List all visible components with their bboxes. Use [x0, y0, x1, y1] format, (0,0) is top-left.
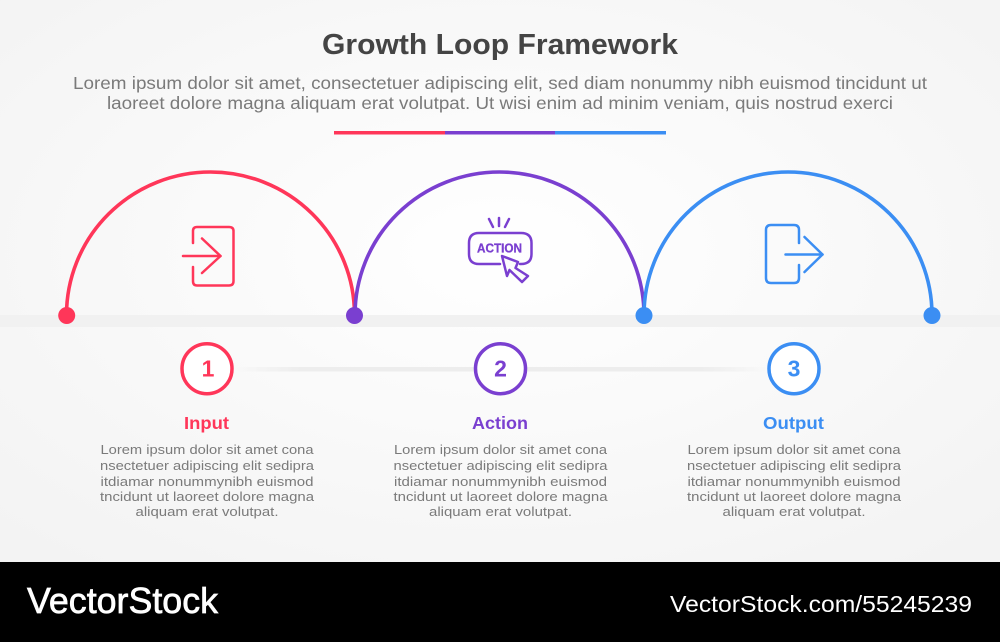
subtitle: Lorem ipsum dolor sit amet, consectetuer adipiscing elit, sed diam nonummy nibh euismod tincidunt ut [73, 73, 927, 93]
step 3 [687, 344, 902, 519]
text block: action: aliquam erat volutpat. [429, 504, 572, 519]
text block: input: tncidunt ut laoreet dolore magna [100, 489, 315, 504]
text block: output [687, 442, 902, 519]
connector between numbers [234, 367, 768, 372]
title: Growth Loop Framework [322, 29, 679, 61]
text block: output: nsectetuer adipiscing elit sedipra [687, 458, 902, 473]
footer logo: VectorStock [27, 580, 219, 621]
text block: input [100, 442, 315, 519]
text block: input: Lorem ipsum dolor sit amet cona [100, 442, 314, 457]
number badge 3 [769, 344, 819, 394]
arc: input [66, 172, 354, 315]
heading: input: Input [184, 413, 229, 433]
text block: input: itdiamar nonummynibh euismod [100, 474, 314, 489]
number badge 3: 3 [788, 356, 800, 382]
icon: logout arrow [766, 225, 822, 283]
text block: action: tncidunt ut laoreet dolore magna [394, 489, 608, 504]
arc: output [644, 172, 932, 315]
timeline dots [58, 307, 940, 324]
icon: login arrow [183, 227, 234, 286]
heading: output: Output [763, 413, 824, 433]
text block: input: aliquam erat volutpat. [136, 504, 278, 519]
number badge 2 [476, 344, 526, 394]
text block: output: Lorem ipsum dolor sit amet cona [688, 442, 901, 457]
footer url: VectorStock.com/55245239 [670, 591, 972, 617]
step 2 [394, 344, 608, 519]
icon: action button: ACTION [477, 242, 522, 256]
arc: action [355, 172, 644, 315]
text block: input: nsectetuer adipiscing elit sedipra [100, 458, 315, 473]
text block: action: itdiamar nonummynibh euismod [394, 474, 607, 489]
text block: output: itdiamar nonummynibh euismod [688, 474, 900, 489]
subtitle [73, 73, 927, 113]
heading: action: Action [472, 413, 528, 433]
step 1 [100, 344, 315, 519]
footer bar [0, 562, 1000, 642]
number badge 2: 2 [494, 356, 507, 382]
number badge 1: 1 [202, 356, 215, 382]
text block: output: aliquam erat volutpat. [722, 504, 866, 519]
timeline band [0, 315, 1000, 327]
number badge 1 [182, 344, 232, 394]
subtitle: laoreet dolore magna aliquam erat volutpat. Ut wisi enim ad minim veniam, quis nostrud exerci [107, 93, 893, 113]
text block: output: tncidunt ut laoreet dolore magna [687, 489, 902, 504]
title divider [334, 131, 666, 134]
text block: action [394, 442, 608, 519]
text block: action: nsectetuer adipiscing elit sedipra [394, 458, 608, 473]
text block: action: Lorem ipsum dolor sit amet cona [394, 442, 608, 457]
icon: action button [469, 218, 532, 282]
